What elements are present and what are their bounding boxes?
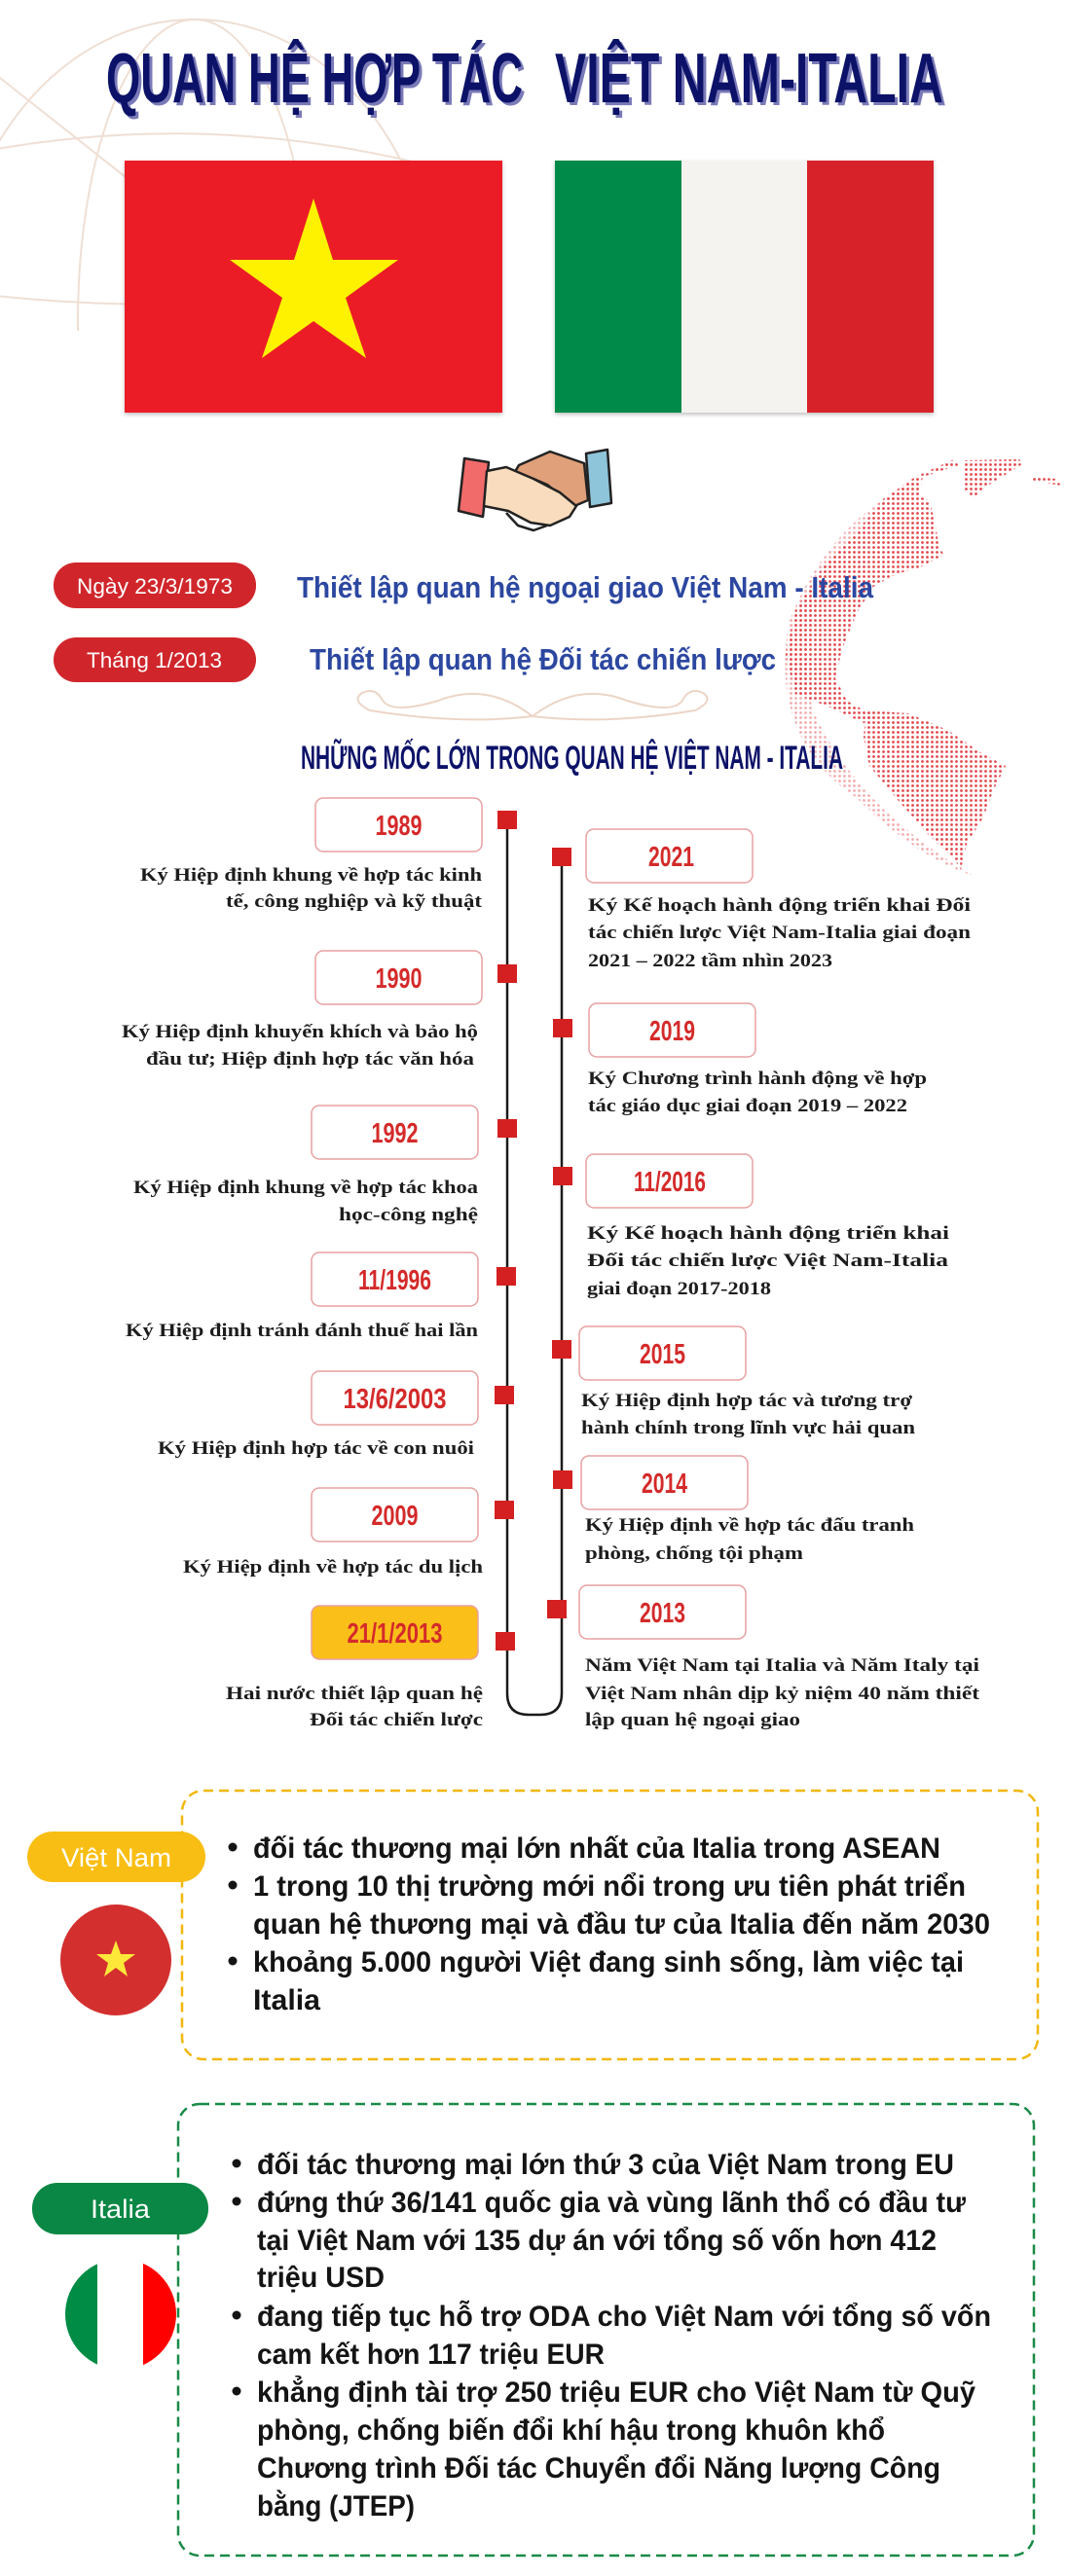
bullet list: Vietnam <box>228 1832 990 2016</box>
item 1989: 1989 <box>376 811 423 842</box>
bullet list: Vietnam: Italia <box>253 1984 320 2016</box>
label pill: Italia <box>32 2183 208 2234</box>
bullet list: Italy: triệu USD <box>257 2262 385 2294</box>
item 2013 <box>547 1585 980 1730</box>
item 1989: Ký Hiệp định khung về hợp tác kinh <box>140 865 482 886</box>
label pill: Việt Nam: Việt Nam <box>61 1843 171 1872</box>
item 2013: 2013 <box>640 1598 685 1629</box>
bullet list: Italy: bằng (JTEP) <box>257 2489 415 2522</box>
panel: Italy facts <box>32 2104 1034 2556</box>
item 2019: tác giáo dục giai đoạn 2019 – 2022 <box>588 1096 907 1116</box>
item 2019 <box>553 1003 927 1116</box>
text: strategic partnership: Thiết lập quan hệ Đối tác chiến lược <box>310 642 776 676</box>
bullet list: Italy: cam kết hơn 117 triệu EUR <box>257 2339 605 2371</box>
item 1989 <box>140 798 517 912</box>
item 2015: 2015 <box>640 1339 685 1370</box>
item 21/1/2013 <box>226 1606 515 1730</box>
item 2013: Năm Việt Nam tại Italia và Năm Italy tại <box>585 1655 979 1676</box>
label pill: Italia: Italia <box>91 2195 151 2224</box>
timeline right items <box>547 829 980 1730</box>
item 2021: Ký Kế hoạch hành động triển khai Đối <box>588 895 971 916</box>
item 2021: 2021 – 2022 tầm nhìn 2023 <box>588 951 832 971</box>
item 1992: 1992 <box>372 1118 419 1149</box>
item 11/2016: Ký Kế hoạch hành động triển khai <box>587 1223 949 1244</box>
item 2014: 2014 <box>642 1469 687 1500</box>
item 1990: 1990 <box>376 963 423 995</box>
pill: date 2013 <box>54 637 256 682</box>
item 2021: tác chiến lược Việt Nam-Italia giai đoạn <box>588 923 972 943</box>
item 21/1/2013: Hai nước thiết lập quan hệ <box>226 1684 483 1704</box>
item 2021: 2021 <box>648 842 694 873</box>
text: diplomatic relations: Thiết lập quan hệ ngoại giao Việt Nam - Italia <box>297 570 874 604</box>
bullet list: Italy: đang tiếp tục hỗ trợ ODA cho Việt Nam với tổng số vốn <box>257 2300 991 2333</box>
bullet list: Italy: phòng, chống biến đổi khí hậu trong khuôn khổ <box>257 2414 885 2447</box>
icon: handshake <box>459 450 611 530</box>
bullet list: Vietnam: khoảng 5.000 người Việt đang sinh sống, làm việc tại <box>253 1946 964 1978</box>
item 2009: Ký Hiệp định về hợp tác du lịch <box>183 1557 484 1578</box>
item 21/1/2013: Đối tác chiến lược <box>310 1710 483 1730</box>
pill: date 2013: Tháng 1/2013 <box>87 648 222 672</box>
bullet list: Vietnam: quan hệ thương mại và đầu tư của Italia đến năm 2030 <box>253 1908 990 1941</box>
bullet list: Italy: đứng thứ 36/141 quốc gia và vùng lãnh thổ có đầu tư <box>257 2187 966 2219</box>
item 2021 <box>552 829 972 971</box>
item 13/6/2003: 13/6/2003 <box>343 1384 446 1415</box>
item 2014: Ký Hiệp định về hợp tác đấu tranh <box>585 1515 915 1536</box>
title: QUAN HỆ HỢP TÁC <box>109 42 526 121</box>
pill: date 1973 <box>54 562 256 608</box>
item 2019: Ký Chương trình hành động về hợp <box>588 1069 927 1089</box>
icon: Italy flag circle <box>65 2264 176 2365</box>
item 2009 <box>183 1488 514 1578</box>
item 11/2016 <box>553 1154 949 1299</box>
item 2015: Ký Hiệp định hợp tác và tương trợ <box>581 1391 913 1411</box>
icon: Vietnam flag circle <box>60 1905 171 2015</box>
item 1989: tế, công nghiệp và kỹ thuật <box>226 891 483 912</box>
item 2013: lập quan hệ ngoại giao <box>585 1710 800 1730</box>
item 21/1/2013: 21/1/2013 <box>347 1618 442 1650</box>
item 2015: hành chính trong lĩnh vực hải quan <box>581 1418 916 1438</box>
decorative globe lines top-left <box>0 18 411 331</box>
item 2019: 2019 <box>649 1016 695 1047</box>
item 2015 <box>552 1326 916 1438</box>
bullet list: Vietnam: đối tác thương mại lớn nhất của Italia trong ASEAN <box>253 1832 940 1865</box>
ornament <box>358 691 707 719</box>
item 1990: Ký Hiệp định khuyến khích và bảo hộ <box>122 1022 478 1042</box>
item 13/6/2003: Ký Hiệp định hợp tác về con nuôi <box>158 1438 474 1459</box>
item 11/2016: Đối tác chiến lược Việt Nam-Italia <box>587 1251 949 1271</box>
item 1992: học-công nghệ <box>339 1205 478 1225</box>
pill: date 1973: Ngày 23/3/1973 <box>77 574 233 599</box>
bullet list: Italy: đối tác thương mại lớn thứ 3 của Việt Nam trong EU <box>257 2149 954 2181</box>
item 2014 <box>553 1456 915 1564</box>
item 2014: phòng, chống tội phạm <box>585 1543 803 1564</box>
item 2013: Việt Nam nhân dịp kỷ niệm 40 năm thiết <box>585 1684 980 1704</box>
bullet list: Vietnam: 1 trong 10 thị trường mới nổi trong ưu tiên phát triển <box>253 1870 966 1903</box>
title: QUAN HỆ HỢP TÁC <box>106 39 523 118</box>
bullet list: Italy: tại Việt Nam với 135 dự án với tổng số vốn hơn 412 <box>257 2225 937 2257</box>
item 11/2016: 11/2016 <box>634 1167 706 1198</box>
flag: Vietnam <box>125 161 502 413</box>
flag: Italy <box>555 161 934 413</box>
label pill: Việt Nam <box>27 1832 205 1882</box>
dotted globe decoration right <box>785 457 1061 876</box>
item 11/1996: 11/1996 <box>358 1265 431 1296</box>
item 1992 <box>133 1106 517 1225</box>
panel: Vietnam facts <box>27 1791 1038 2059</box>
item 13/6/2003 <box>158 1371 514 1459</box>
item 1990 <box>122 951 517 1070</box>
bullet list: Italy <box>232 2149 991 2522</box>
item 1990: đầu tư; Hiệp định hợp tác văn hóa <box>146 1049 475 1070</box>
item 11/2016: giai đoạn 2017-2018 <box>587 1279 771 1299</box>
item 11/1996 <box>126 1252 516 1341</box>
timeline axis <box>507 822 562 1715</box>
bullet list: Italy: Chương trình Đối tác Chuyển đổi Năng lượng Công <box>257 2452 940 2485</box>
item 2009: 2009 <box>372 1501 419 1532</box>
item 1992: Ký Hiệp định khung về hợp tác khoa <box>133 1178 479 1198</box>
item 11/1996: Ký Hiệp định tránh đánh thuế hai lần <box>126 1321 479 1341</box>
timeline left items <box>122 798 517 1730</box>
bullet list: Italy: khẳng định tài trợ 250 triệu EUR cho Việt Nam từ Quỹ <box>257 2376 975 2409</box>
